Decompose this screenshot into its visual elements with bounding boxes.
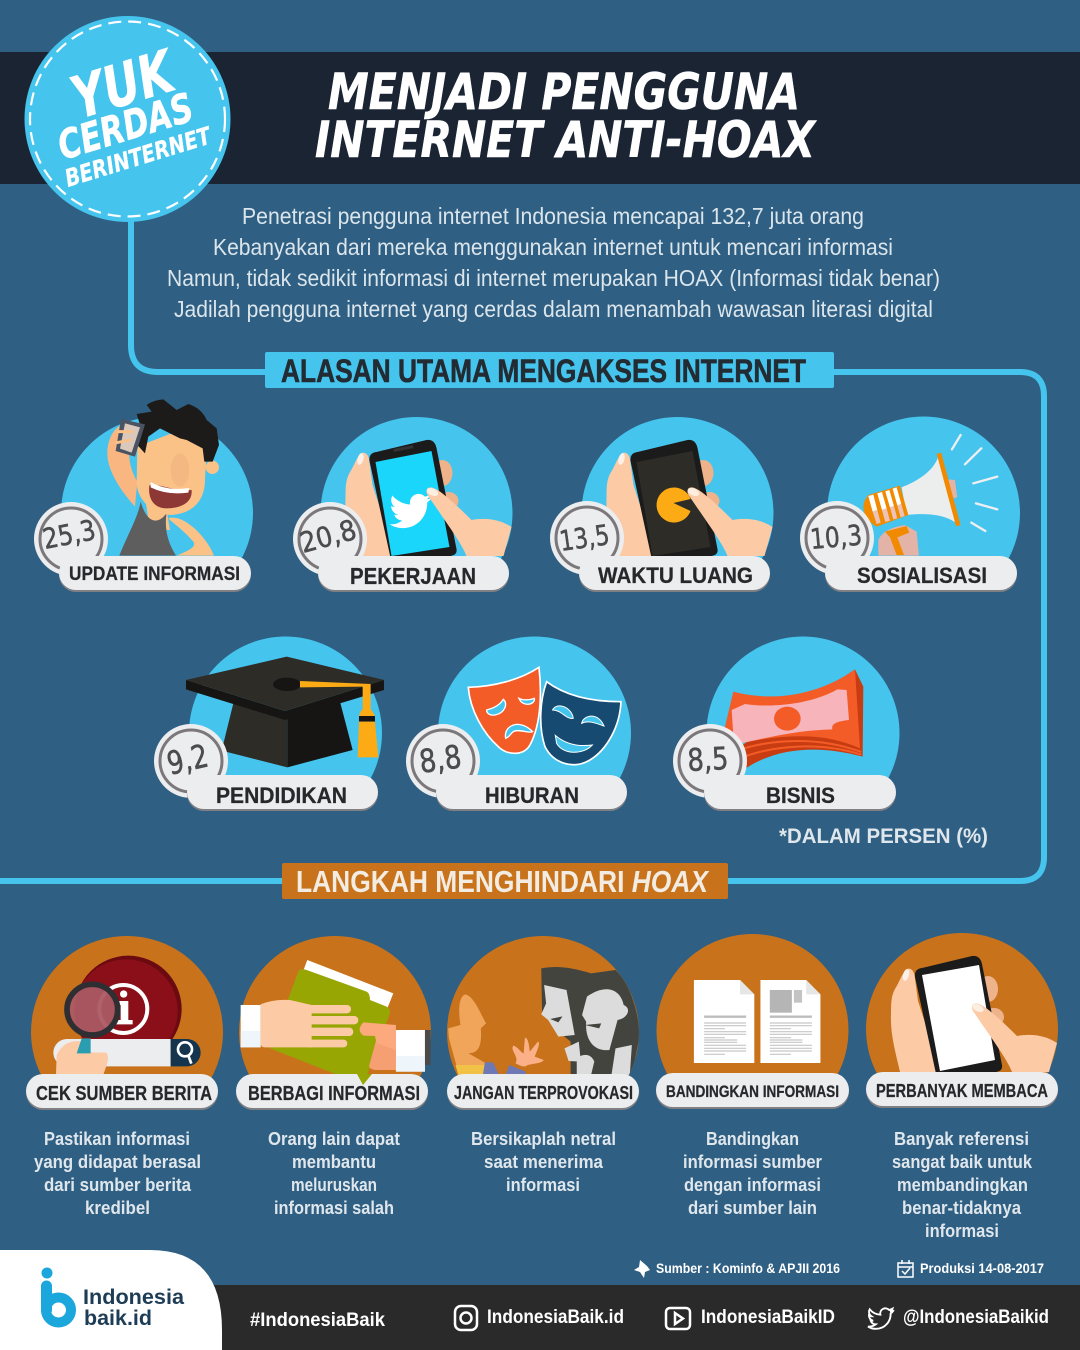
illustration: theatre masks: [468, 667, 621, 765]
illustration: phone with pacman: [606, 440, 772, 567]
label pill: [26, 1074, 218, 1110]
illustration: sharing folder: [241, 960, 431, 1085]
icon: calendar: [898, 1260, 913, 1277]
description: membandingkan: [897, 1175, 1028, 1195]
footer bar: [0, 1285, 1080, 1350]
panel: sosialisasi: [800, 416, 1020, 610]
label pill: UPDATE INFORMASI: [69, 564, 240, 585]
badge: yuk cerdas berinternet: BERINTERNET: [62, 121, 215, 193]
header band: [0, 52, 1080, 184]
description: [268, 1129, 400, 1218]
description: meluruskan: [291, 1175, 377, 1195]
badge: yuk cerdas berinternet: [24, 16, 230, 222]
intro paragraph: Namun, tidak sedikit informasi di internet merupakan HOAX (Informasi tidak benar): [167, 265, 940, 291]
value badge: 25,3: [34, 502, 108, 576]
youtube handle: IndonesiaBaikID: [701, 1306, 835, 1328]
description: benar-tidaknya: [902, 1198, 1022, 1218]
badge: yuk cerdas berinternet: YUK: [63, 36, 185, 132]
panel: jangan terprovokasi: [447, 936, 639, 1195]
main title: [315, 63, 817, 169]
twitter handle: [868, 1306, 1049, 1329]
intro paragraph: Kebanyakan dari mereka menggunakan internet untuk mencari informasi: [213, 234, 893, 260]
description: Banyak referensi: [894, 1129, 1029, 1149]
panel: bandingkan informasi: [656, 934, 849, 1218]
illustration: two documents: [694, 980, 820, 1063]
description: informasi sumber: [683, 1152, 822, 1172]
value badge: 10,3: [800, 501, 874, 575]
connector line: [0, 215, 1044, 881]
main title: INTERNET ANTI-HOAX: [315, 111, 817, 169]
instagram handle: IndonesiaBaik.id: [487, 1306, 624, 1328]
label pill: [436, 775, 627, 811]
description: membantu: [292, 1152, 376, 1172]
youtube handle: [666, 1306, 835, 1329]
intro paragraph: [167, 203, 940, 322]
description: Bandingkan: [706, 1129, 799, 1149]
description: informasi: [506, 1175, 580, 1195]
icon: twitter: [868, 1308, 893, 1329]
source credit: Sumber : Kominfo & APJII 2016: [656, 1261, 840, 1276]
label pill: SOSIALISASI: [857, 563, 987, 588]
intro paragraph: Penetrasi pengguna internet Indonesia mencapai 132,7 juta orang: [242, 203, 864, 229]
label pill: [187, 775, 378, 811]
icon: youtube: [666, 1308, 690, 1329]
twitter handle: @IndonesiaBaikid: [903, 1306, 1049, 1328]
label pill: JANGAN TERPROVOKASI: [454, 1083, 633, 1103]
panel: perbanyak membaca: [866, 933, 1058, 1241]
main title: MENJADI PENGGUNA: [328, 63, 800, 121]
value badge: 8,8: [406, 724, 480, 798]
logo mark: [42, 1268, 71, 1322]
description: dengan informasi: [684, 1175, 821, 1195]
description: kredibel: [85, 1198, 150, 1218]
value badge: 20,8: [293, 502, 367, 576]
value badge: 13,5: 13,5: [557, 518, 611, 558]
label pill: [579, 556, 770, 592]
description: Bersikaplah netral: [471, 1129, 616, 1149]
label pill: PENDIDIKAN: [216, 783, 347, 808]
logo text: [83, 1286, 184, 1330]
description: [683, 1129, 822, 1218]
logo tab: [0, 1250, 222, 1350]
panel: update informasi: [34, 399, 253, 609]
description: [34, 1129, 201, 1218]
label pill: WAKTU LUANG: [598, 563, 753, 588]
label pill: [656, 1073, 849, 1109]
panel: hiburan: [406, 636, 631, 830]
label pill: HIBURAN: [485, 783, 579, 808]
label pill: [447, 1074, 639, 1110]
icon: pin: [634, 1260, 650, 1278]
value badge: 20,8: 20,8: [296, 513, 360, 560]
label pill: BANDINGKAN INFORMASI: [666, 1083, 839, 1101]
label pill: BERBAGI INFORMASI: [248, 1083, 420, 1105]
description: saat menerima: [484, 1152, 604, 1172]
label pill: BISNIS: [766, 783, 835, 808]
illustration: graduation cap: [186, 657, 384, 767]
description: sangat baik untuk: [892, 1152, 1033, 1172]
panel: pendidikan: [154, 636, 384, 830]
label pill: CEK SUMBER BERITA: [36, 1083, 212, 1105]
label pill: [318, 556, 509, 592]
illustration: phone blank screen: [891, 956, 1057, 1083]
description: [471, 1129, 616, 1195]
production date: Produksi 14-08-2017: [920, 1261, 1044, 1276]
hashtag: #IndonesiaBaik: [250, 1309, 385, 1331]
value badge: 8,8: 8,8: [417, 737, 464, 781]
source credit: [634, 1260, 840, 1278]
heading: langkah menghindari hoax: LANGKAH MENGHINDARI HOAX: [296, 864, 710, 899]
description: Orang lain dapat: [268, 1129, 400, 1149]
value badge: 13,5: [550, 501, 624, 575]
value badge: 9,2: [154, 724, 228, 798]
description: informasi salah: [274, 1198, 394, 1218]
description: dari sumber berita: [44, 1175, 192, 1195]
panel: cek sumber berita: [26, 936, 223, 1218]
value badge: 10,3: 10,3: [809, 519, 863, 556]
panel: berbagi informasi: [236, 936, 431, 1218]
illustration: banknotes: [725, 669, 863, 770]
illustration: man with phone: [107, 399, 219, 556]
logo text: baik.id: [84, 1307, 152, 1330]
illustration: arguing people: [448, 967, 639, 1075]
value badge: 25,3: 25,3: [40, 513, 98, 556]
label pill: [866, 1072, 1058, 1108]
icon: instagram: [455, 1306, 477, 1330]
description: Pastikan informasi: [44, 1129, 190, 1149]
intro paragraph: Jadilah pengguna internet yang cerdas dalam menambah wawasan literasi digital: [174, 296, 933, 322]
label pill: [236, 1074, 428, 1110]
illustration: megaphone: [863, 435, 997, 556]
value badge: 8,5: 8,5: [687, 741, 729, 779]
value badge: 8,5: [673, 724, 747, 798]
note: dalam persen: *DALAM PERSEN (%): [779, 825, 988, 848]
label pill: [825, 556, 1017, 592]
illustration: phone with twitter bird: [345, 440, 512, 567]
value badge: 9,2: 9,2: [163, 737, 212, 783]
illustration: info search: [53, 956, 201, 1075]
label pill: [59, 556, 251, 592]
logo text: Indonesia: [83, 1286, 184, 1309]
heading: alasan utama: ALASAN UTAMA MENGAKSES INTERNET: [281, 353, 806, 389]
description: yang didapat berasal: [34, 1152, 201, 1172]
description: [892, 1129, 1033, 1241]
description: informasi: [925, 1221, 999, 1241]
panel: pekerjaan: [293, 417, 512, 609]
description: dari sumber lain: [688, 1198, 817, 1218]
badge: yuk cerdas berinternet: CERDAS: [52, 85, 199, 170]
label pill: [704, 775, 896, 811]
panel: waktu luang: [550, 417, 774, 609]
instagram handle: [455, 1306, 624, 1330]
panel: bisnis: [673, 636, 900, 830]
label pill: PEKERJAAN: [350, 563, 476, 589]
